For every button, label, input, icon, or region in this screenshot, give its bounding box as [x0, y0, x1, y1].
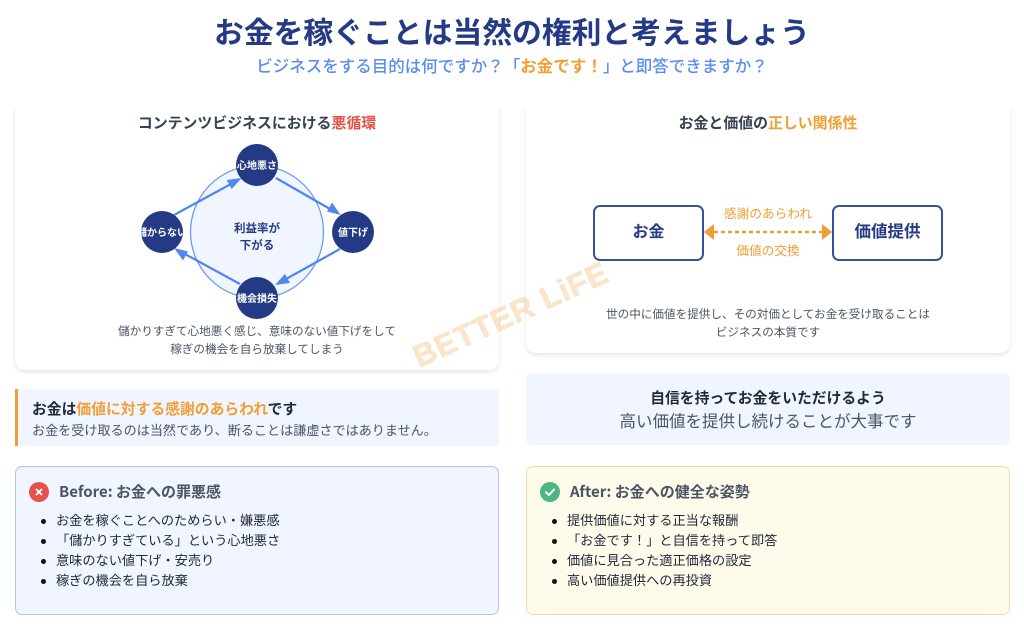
before list: 「儲かりすぎている」という心地悪さ — [56, 533, 280, 548]
node: lost opportunity — [236, 277, 278, 319]
callout: money is gratitude — [15, 389, 499, 446]
before list: お金を稼ぐことへのためらい・嫌悪感 — [56, 513, 280, 528]
description: money and value: ビジネスの本質です — [716, 326, 820, 339]
description: vicious cycle — [118, 325, 395, 354]
center circle: 下がる — [240, 238, 274, 252]
label: gratitude: 感謝のあらわれ — [724, 207, 812, 221]
callout heading: お金は価値に対する感謝のあらわれです — [32, 402, 297, 418]
before list — [41, 513, 280, 588]
after list — [552, 513, 777, 588]
panel: vicious cycle — [15, 90, 499, 370]
center circle: 利益率が — [234, 221, 280, 235]
icon: red cross — [29, 482, 49, 502]
node: price cut: 値下げ — [338, 226, 368, 239]
before list: 意味のない値下げ・安売り — [56, 553, 214, 568]
before heading: Before: お金への罪悪感 — [59, 481, 221, 502]
after list: 提供価値に対する正当な報酬 — [567, 513, 738, 528]
heading: vicious cycle: コンテンツビジネスにおける悪循環 — [138, 116, 376, 132]
label: exchange of value: 価値の交換 — [736, 244, 800, 258]
description: money and value: 世の中に価値を提供し、その対価としてお金を受け取ることは — [606, 308, 930, 321]
callout text: 高い価値を提供し続けることが大事です — [620, 413, 916, 431]
node: price cut — [332, 211, 374, 253]
panel: money and value — [526, 90, 1010, 353]
watermark: BETTER LiFE — [408, 255, 614, 374]
box: money — [593, 205, 704, 261]
box: value provision — [832, 205, 943, 261]
callout: keep providing value — [526, 373, 1010, 445]
arrow: right to bottom — [275, 249, 340, 285]
after list: 高い価値提供への再投資 — [567, 573, 712, 588]
arrow: exchange — [704, 224, 832, 240]
box: money: お金 — [632, 224, 664, 241]
description: vicious cycle: 稼ぎの機会を自ら放棄してしまう — [170, 343, 344, 356]
callout heading: 自信を持ってお金をいただけるよう — [650, 391, 886, 407]
after heading: After: お金への健全な姿勢 — [570, 481, 750, 502]
callout text: お金を受け取るのは当然であり、断ることは謙虚さではありません。 — [32, 423, 437, 438]
arrow: left to top — [174, 178, 242, 215]
node: not profitable — [141, 211, 183, 253]
node: discomfort — [236, 144, 278, 186]
description: money and value — [606, 308, 930, 338]
node: discomfort: 心地悪さ — [237, 159, 277, 172]
arrow: bottom to left — [174, 248, 240, 284]
icon: green check — [540, 482, 560, 502]
arrow: top to right — [276, 178, 341, 215]
heading: money and value: お金と価値の正しい関係性 — [679, 116, 857, 132]
panel: before — [15, 466, 499, 615]
center circle — [190, 166, 324, 298]
after list: 「お金です！」と自信を持って即答 — [567, 533, 777, 548]
cycle diagram — [141, 144, 374, 319]
node: not profitable: 儲からない — [137, 226, 187, 239]
panel: after — [526, 466, 1010, 615]
subtitle: ビジネスをする目的は何ですか？「お金です！」と即答できますか？ — [256, 58, 768, 76]
title: お金を稼ぐことは当然の権利と考えましょう — [214, 17, 810, 50]
before list: 稼ぎの機会を自ら放棄 — [56, 573, 188, 588]
box: value provision: 価値提供 — [854, 223, 920, 241]
after list: 価値に見合った適正価格の設定 — [567, 553, 752, 568]
node: lost opportunity: 機会損失 — [237, 292, 277, 305]
description: vicious cycle: 儲かりすぎて心地悪く感じ、意味のない値下げをして — [118, 325, 396, 338]
